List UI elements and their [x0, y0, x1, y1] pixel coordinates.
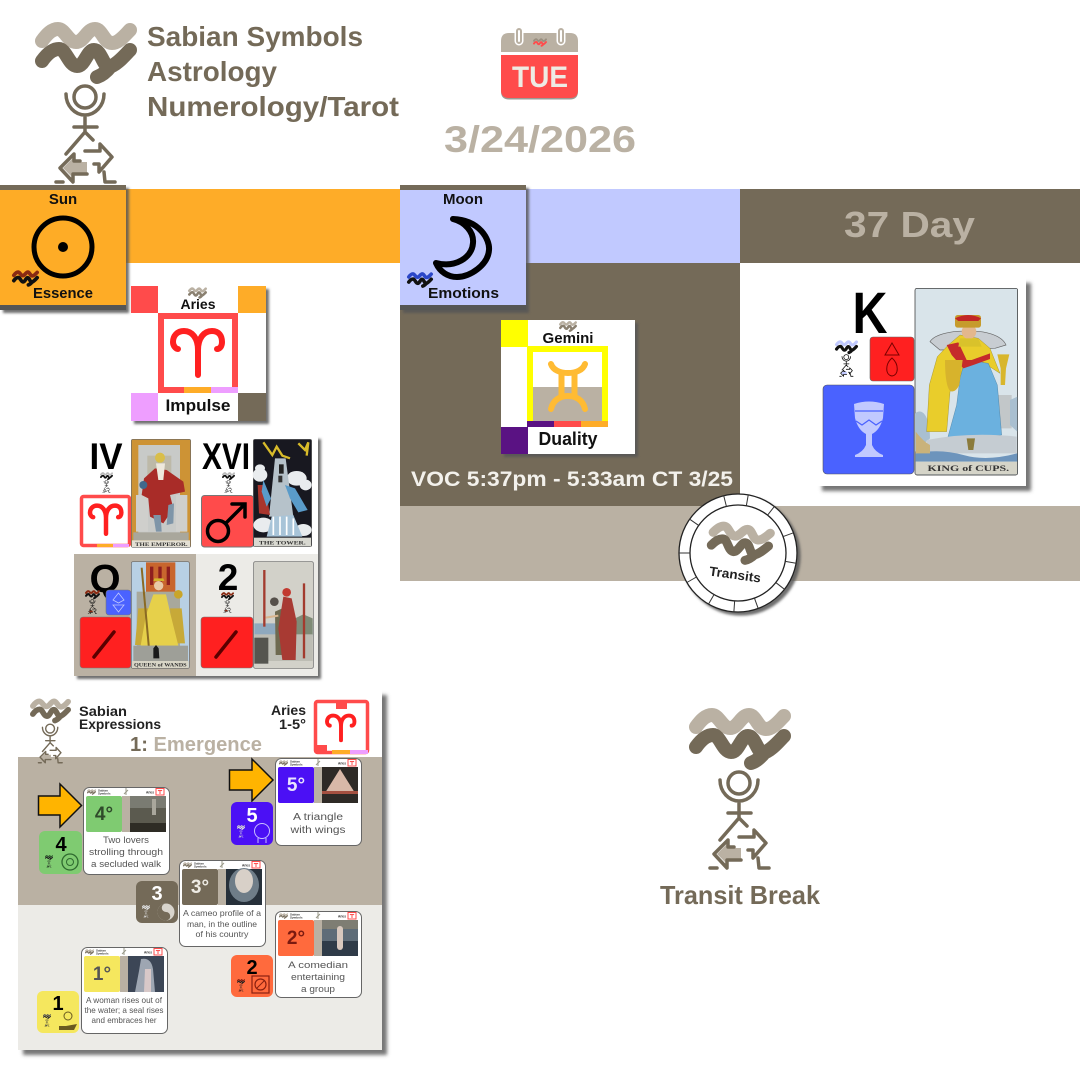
panel: color bands — [0, 189, 1080, 581]
panel: Sabian expressions — [18, 690, 382, 1050]
photo — [130, 796, 166, 832]
icon: Transits wheel: Transits — [708, 563, 762, 586]
tarot card: Two of Wands — [254, 562, 313, 668]
card: 5 degrees: with wings — [289, 825, 346, 836]
number tile 3: 3 — [151, 883, 163, 905]
icon: Mars — [208, 504, 245, 542]
panel: King of Cups: K — [852, 281, 888, 346]
panel: Gemini sign card: Gemini — [542, 330, 594, 347]
icon: crescent moon — [436, 219, 489, 277]
card: 3 degrees — [180, 860, 266, 946]
card: 5 degrees: A triangle — [293, 812, 344, 823]
card: 3 degrees: man, in the outline — [187, 919, 257, 929]
panel: Gemini sign card: Duality — [538, 429, 598, 449]
XVI tower — [202, 436, 312, 547]
panel: Sun: Essence — [33, 285, 93, 302]
panel: Aries sign card: Aries — [180, 296, 216, 312]
2 of wands: 2 — [218, 557, 238, 598]
arrow: to card 4 — [38, 784, 82, 827]
photo — [128, 956, 164, 992]
heading: degree range — [271, 702, 306, 732]
panel: Moon — [400, 185, 526, 310]
card: 4 degrees: strolling through — [89, 847, 163, 857]
panel: Sun — [0, 185, 126, 310]
icon: Aries frame with Mars — [316, 700, 368, 754]
IV emperor — [82, 436, 191, 548]
photo — [322, 920, 358, 956]
calendar icon: Tuesday — [501, 31, 578, 100]
card: 1 degree — [82, 948, 168, 1034]
title — [147, 21, 399, 122]
day number: 37 Day — [844, 204, 975, 245]
heading: degree range: 1-5° — [279, 716, 306, 732]
transit break logo — [696, 715, 784, 868]
number tile 2: 2 — [246, 957, 258, 979]
card: 4 degrees: Two lovers — [103, 835, 150, 845]
icon: Aries frame — [161, 316, 238, 393]
panel: numerology and tarot — [74, 436, 318, 676]
header logo — [42, 29, 130, 182]
icon: cup — [823, 385, 914, 474]
card: 2 degrees: A comedian — [288, 960, 348, 970]
tarot card: King of Cups — [915, 288, 1018, 475]
icon: wand — [94, 632, 114, 657]
XVI tower: XVI — [202, 436, 250, 477]
Q queen of wands: Q — [89, 557, 121, 601]
number tile 4: 4 — [55, 834, 67, 856]
icon: sun glyph — [34, 218, 92, 276]
tarot card: Queen of Wands: QUEEN of WANDS — [134, 663, 187, 668]
transit break label: Transit Break — [660, 880, 821, 910]
number tile 2 — [231, 955, 273, 997]
date: 3/24/2026 — [444, 119, 636, 160]
panel: Moon: Emotions — [428, 285, 499, 302]
title: Sabian Symbols — [147, 21, 363, 52]
photo — [226, 868, 262, 905]
card: 4 degrees — [84, 788, 170, 874]
number tile 3 — [136, 881, 178, 923]
panel: King of Cups — [817, 278, 1026, 486]
card: 1 degree: and embraces her — [92, 1015, 157, 1025]
card: 4 degrees: a secluded walk — [91, 859, 162, 869]
card: 3 degrees: of his country — [196, 929, 249, 939]
heading: Sabian Expressions: Expressions — [79, 716, 161, 732]
number tile 5: 5 — [246, 805, 258, 827]
heading: Emergence: 1: Emergence — [130, 734, 262, 756]
tarot card: The Tower: THE TOWER. — [259, 540, 307, 546]
title: Numerology/Tarot — [147, 91, 399, 122]
card: 2 degrees — [276, 912, 362, 998]
panel: Aries sign card — [131, 286, 266, 421]
panel: Gemini sign card — [501, 320, 635, 454]
icon: Transits wheel — [679, 494, 797, 612]
arrow: to card 5 — [230, 759, 273, 801]
card: 1 degree: the water; a seal rises — [84, 1005, 164, 1015]
card: 3 degrees: 3° — [191, 877, 209, 898]
card: 1 degree: A woman rises out of — [86, 995, 163, 1005]
Q queen of wands — [80, 557, 189, 668]
number tile 1: 1 — [52, 993, 64, 1015]
tarot card: The Emperor: THE EMPEROR. — [135, 542, 189, 548]
photo — [322, 767, 358, 803]
calendar icon: Tuesday: TUE — [512, 61, 568, 94]
number tile 5 — [231, 802, 273, 845]
icon: Gemini frame — [527, 349, 608, 427]
IV emperor: IV — [90, 436, 123, 477]
icon: wand — [216, 632, 236, 657]
card: 2 degrees: 2° — [287, 928, 305, 949]
panel: Aries sign card: Impulse — [166, 396, 230, 415]
icon: fire element — [870, 337, 914, 381]
card: 1 degree: 1° — [93, 964, 111, 985]
heading: Sabian Expressions — [79, 703, 161, 732]
2 of wands — [201, 557, 313, 668]
card: 2 degrees: a group — [301, 984, 335, 994]
card: 3 degrees: A cameo profile of a — [183, 908, 261, 918]
panel: Moon: Moon — [443, 191, 483, 208]
number tile 1 — [37, 991, 79, 1033]
heading: degree range: Aries — [271, 702, 306, 718]
panel: Sun: Sun — [49, 191, 77, 208]
card: 2 degrees: entertaining — [291, 972, 345, 982]
number tile 4 — [39, 831, 82, 874]
card: 5 degrees — [276, 758, 362, 846]
card: 4 degrees: 4° — [95, 804, 113, 825]
heading: Sabian Expressions: Sabian — [79, 703, 127, 719]
tarot card: King of Cups: KING of CUPS. — [927, 463, 1009, 473]
card: 5 degrees: 5° — [287, 775, 305, 796]
void of course text: VOC 5:37pm - 5:33am CT 3/25 — [411, 468, 733, 491]
title: Astrology — [147, 56, 277, 87]
